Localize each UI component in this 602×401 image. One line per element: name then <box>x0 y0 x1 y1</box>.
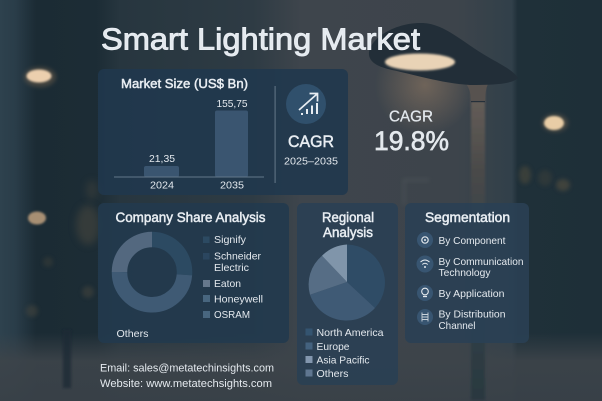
pie chart <box>309 244 385 320</box>
heading: regional analysis: Analysis <box>323 225 373 240</box>
light: left window lamp <box>24 67 56 87</box>
panel: segmentation <box>405 203 529 343</box>
heading: regional analysis: Regional <box>322 210 374 225</box>
panel: market size <box>98 69 348 195</box>
legend: companies <box>116 234 263 340</box>
legend: regions: North America <box>316 327 384 339</box>
legend: companies: Others <box>116 328 148 340</box>
contact details: Website: www.metatechsights.com <box>100 378 272 390</box>
title: Smart Lighting Market <box>101 22 420 56</box>
segment: by application: By Application <box>438 288 505 300</box>
legend: companies: Electric <box>214 262 249 274</box>
segment: by distribution channel <box>417 308 506 332</box>
segment: by distribution channel: Channel <box>438 320 476 332</box>
panel: company share analysis <box>98 203 289 343</box>
heading: regional analysis <box>322 210 374 240</box>
legend: companies: Schneider <box>214 250 261 262</box>
panel: regional analysis <box>297 203 398 385</box>
text: CAGR: CAGR <box>288 132 334 151</box>
heading: market size: Market Size (US$ Bn) <box>121 76 248 91</box>
street lamp <box>369 23 518 400</box>
legend: regions: Asia Pacific <box>316 354 370 366</box>
legend: regions: Others <box>316 368 348 380</box>
callout: CAGR 19.8% <box>374 108 449 156</box>
callout: CAGR 19.8%: CAGR <box>389 108 433 126</box>
contact details <box>100 362 274 390</box>
callout: CAGR 19.8%: 19.8% <box>374 126 449 156</box>
bar chart: market size: 155,75 <box>216 98 248 110</box>
legend: regions: Europe <box>316 341 350 353</box>
legend: companies: OSRAM <box>214 309 250 321</box>
bar chart: market size <box>114 98 264 192</box>
bar chart: market size: 2024 <box>150 180 174 192</box>
segment: by communication technology: By Communication <box>438 256 524 268</box>
light: right window lamp <box>542 114 568 132</box>
icon: growth chart arrow <box>286 84 326 124</box>
bar chart: market size: 21,35 <box>149 153 175 165</box>
text: CAGR period: 2025–2035 <box>284 156 338 168</box>
legend: companies: Honeywell <box>214 294 263 306</box>
segment: by communication technology <box>416 256 524 279</box>
segment: by communication technology: Technology <box>438 267 491 279</box>
donut chart <box>119 239 185 305</box>
legend: companies: Signify <box>214 234 247 246</box>
contact details: Email: sales@metatechinsights.com <box>100 362 274 374</box>
heading: company share: Company Share Analysis <box>116 210 266 225</box>
segment: by component: By Component <box>438 235 506 247</box>
heading: segmentation: Segmentation <box>425 210 510 225</box>
segment: by distribution channel: By Distribution <box>438 308 506 320</box>
bar chart: market size: 2035 <box>220 180 244 192</box>
legend: regions <box>306 327 384 380</box>
light: lower left window lamp <box>28 212 46 224</box>
legend: companies: Eaton <box>214 278 241 290</box>
